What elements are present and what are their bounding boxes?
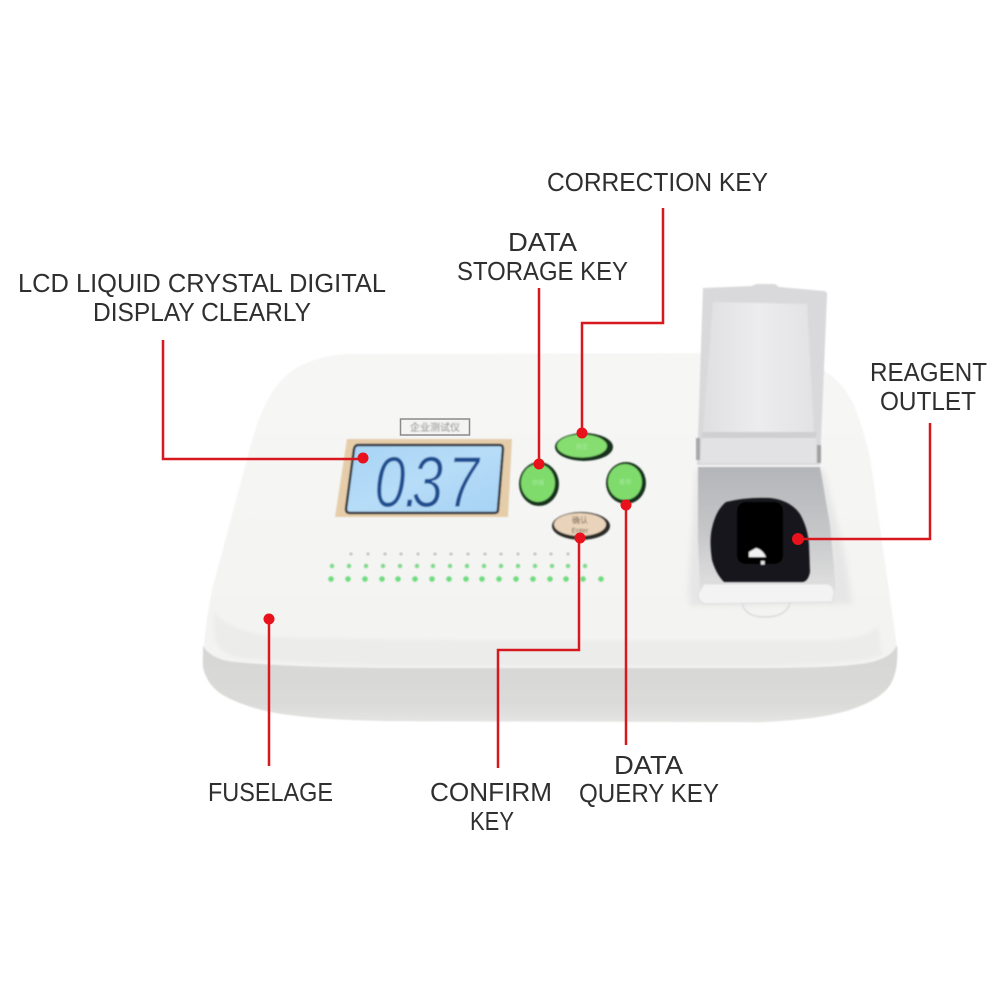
open lid <box>696 284 827 465</box>
button: data query: 查询 <box>619 478 631 486</box>
label: data query key <box>579 750 719 808</box>
LCD display <box>335 439 512 523</box>
label: data storage key <box>457 227 628 286</box>
button: data storage <box>519 462 559 506</box>
label: reagent outlet: OUTLET <box>880 386 976 416</box>
nameplate: 企业测试仪 <box>410 421 460 434</box>
well <box>698 467 836 590</box>
reading: 0.37 <box>374 442 481 523</box>
label: confirm key <box>430 777 552 836</box>
button: correction <box>555 433 613 461</box>
callout dots <box>264 428 804 624</box>
label: reagent outlet: REAGENT <box>870 357 987 387</box>
label: confirm key: KEY <box>470 806 514 836</box>
label: confirm key: CONFIRM <box>430 777 552 807</box>
label: data storage key: DATA <box>508 227 578 257</box>
button: data query <box>606 462 646 504</box>
label: data query key: QUERY KEY <box>579 778 719 808</box>
button: correction: 校正 <box>576 443 588 451</box>
reagent outlet <box>710 498 810 582</box>
label: correction key: CORRECTION KEY <box>547 167 768 197</box>
label: LCD: DISPLAY CLEARLY <box>93 297 311 327</box>
button: confirm: Enter <box>572 528 589 535</box>
reagent compartment <box>688 284 852 617</box>
label: LCD: LCD LIQUID CRYSTAL DIGITAL <box>18 268 386 298</box>
label: reagent outlet <box>870 357 987 416</box>
label: data query key: DATA <box>614 750 684 780</box>
speaker dots <box>328 552 604 582</box>
label: data storage key: STORAGE KEY <box>457 256 628 286</box>
instrument body <box>203 353 897 722</box>
button: confirm <box>552 512 610 540</box>
compartment recess <box>688 470 852 606</box>
front tray <box>698 584 834 617</box>
label: LCD <box>18 268 386 327</box>
label: fuselage: FUSELAGE <box>208 777 333 807</box>
button: data storage: 存储 <box>532 479 544 487</box>
button: confirm: 确认 <box>572 515 588 525</box>
nameplate <box>400 419 470 435</box>
callout lines <box>163 208 930 768</box>
